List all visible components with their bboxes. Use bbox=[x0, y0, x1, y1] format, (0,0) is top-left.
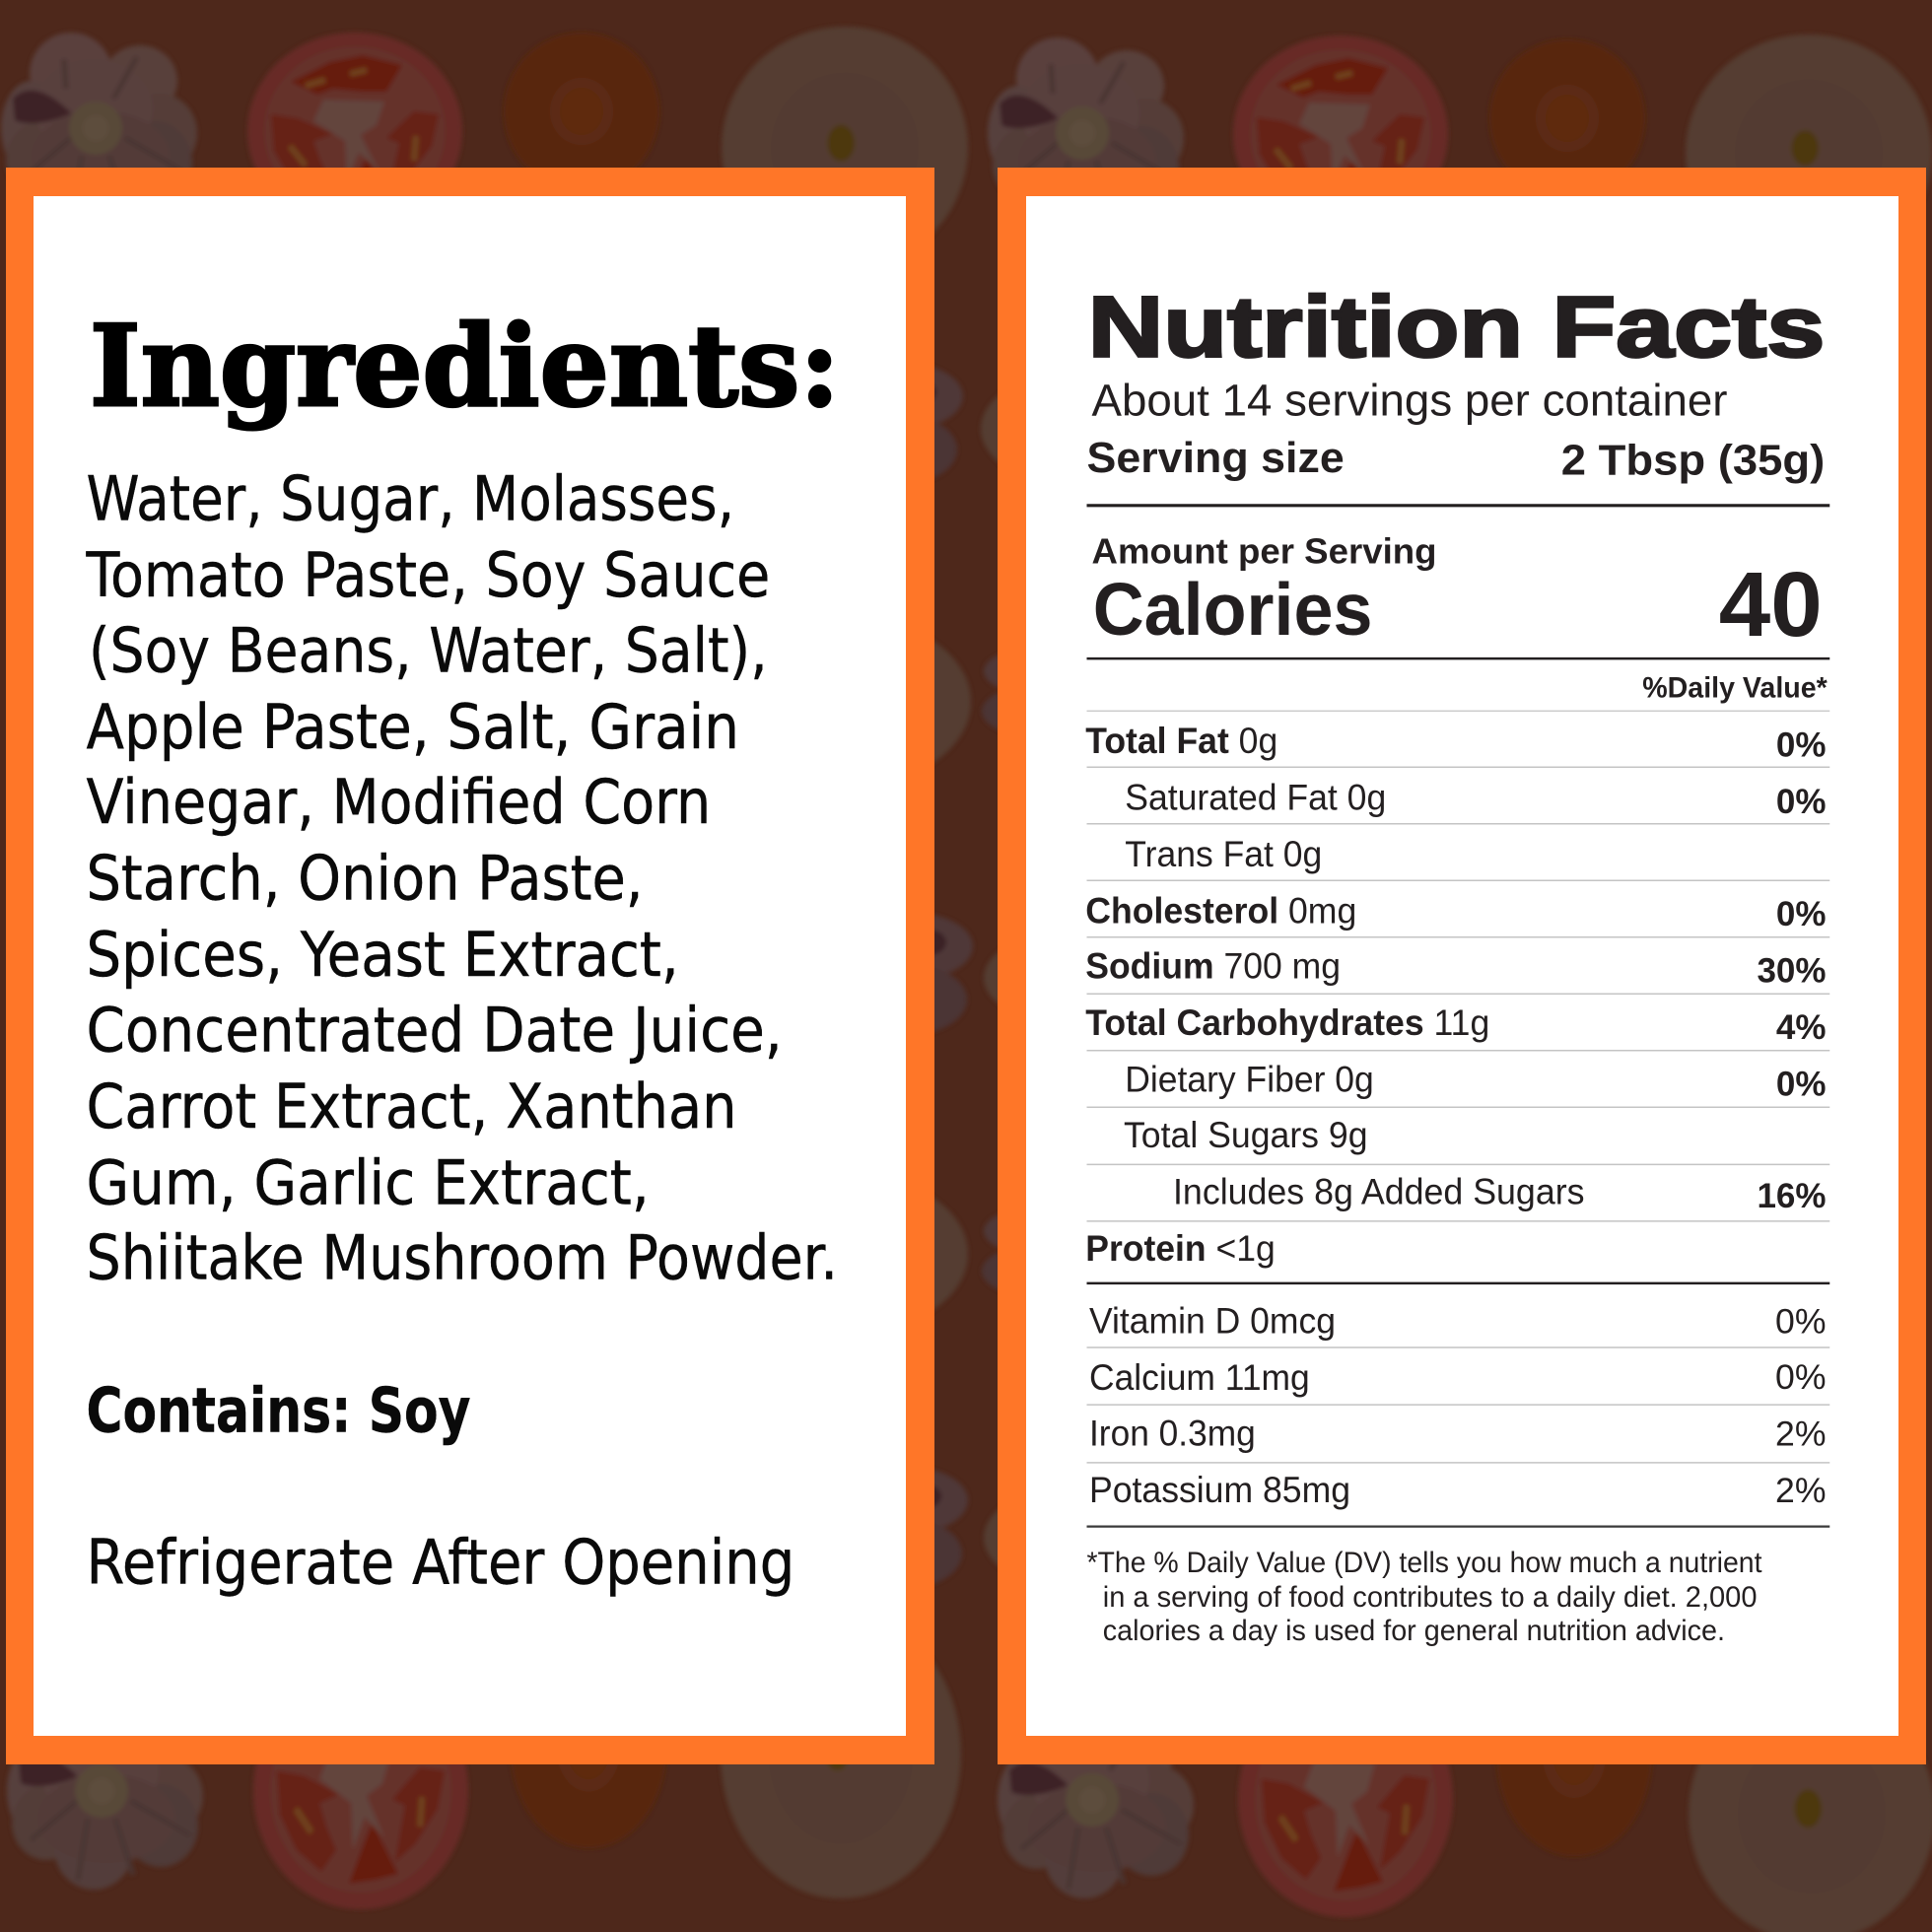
servings per container: About 14 servings per container bbox=[1092, 375, 1728, 425]
nutrient table: Total Sugars 9g bbox=[1124, 1114, 1368, 1155]
heading: ingredients: Ingredients: bbox=[90, 301, 840, 432]
nutrient table: 16% bbox=[1757, 1177, 1827, 1215]
nutrient table: 4% bbox=[1776, 1008, 1827, 1047]
serving size bbox=[1086, 434, 1825, 484]
heading: nutrition facts: Nutrition Facts bbox=[1088, 278, 1825, 375]
footnote bbox=[1086, 1547, 1762, 1647]
ingredients list: Shiitake Mushroom Powder. bbox=[87, 1222, 838, 1294]
ingredients list: Spices, Yeast Extract, bbox=[87, 919, 679, 991]
serving size: 2 Tbsp (35g) bbox=[1561, 436, 1825, 484]
vegetable pattern: bottom row bbox=[7, 1611, 1932, 1932]
vitamins and minerals table bbox=[1086, 1299, 1829, 1510]
nutrient table bbox=[1085, 711, 1829, 1269]
ingredients list: Starch, Onion Paste, bbox=[87, 843, 643, 915]
nutrient table: Trans Fat 0g bbox=[1125, 833, 1322, 874]
vegetable pattern: top row bbox=[1, 27, 1932, 271]
vitamins and minerals table: 0% bbox=[1775, 1357, 1827, 1397]
footnote: *The % Daily Value (DV) tells you how much a nutrient bbox=[1086, 1547, 1762, 1579]
ingredients list: Concentrated Date Juice, bbox=[87, 994, 783, 1066]
ingredients list: Apple Paste, Salt, Grain bbox=[87, 691, 739, 763]
nutrient table: Includes 8g Added Sugars bbox=[1173, 1170, 1585, 1211]
storage note: Refrigerate After Opening bbox=[87, 1526, 794, 1598]
vitamins and minerals table: 2% bbox=[1775, 1414, 1827, 1453]
nutrient table: 0% bbox=[1776, 895, 1827, 933]
daily value header: %Daily Value* bbox=[1642, 672, 1828, 705]
nutrient table: 0% bbox=[1776, 783, 1827, 821]
vitamins and minerals table: Calcium 11mg bbox=[1089, 1356, 1310, 1398]
nutrient table: 0% bbox=[1776, 1065, 1827, 1103]
panel: nutrition facts bbox=[998, 168, 1926, 1764]
vitamins and minerals table: 0% bbox=[1775, 1302, 1827, 1342]
vitamins and minerals table: Vitamin D 0mcg bbox=[1089, 1300, 1336, 1342]
serving size: Serving size bbox=[1086, 434, 1345, 482]
vitamins and minerals table: 2% bbox=[1775, 1471, 1827, 1510]
ingredients list bbox=[86, 463, 838, 1293]
vitamins and minerals table: Iron 0.3mg bbox=[1089, 1412, 1256, 1453]
ingredients list: (Soy Beans, Water, Salt), bbox=[89, 614, 768, 686]
footnote: calories a day is used for general nutrition advice. bbox=[1103, 1615, 1725, 1647]
nutrient table: Dietary Fiber 0g bbox=[1125, 1058, 1374, 1099]
footnote: in a serving of food contributes to a daily diet. 2,000 bbox=[1103, 1581, 1757, 1614]
ingredients list: Tomato Paste, Soy Sauce bbox=[86, 539, 770, 611]
nutrient table: 0% bbox=[1776, 726, 1827, 765]
nutrient table: Cholesterol 0mg bbox=[1085, 889, 1356, 931]
nutrient table: 30% bbox=[1757, 951, 1827, 990]
nutrient table: Total Fat 0g bbox=[1085, 720, 1277, 761]
nutrient table: Sodium 700 mg bbox=[1085, 944, 1341, 986]
nutrient table: Protein <1g bbox=[1085, 1227, 1276, 1269]
ingredients list: Carrot Extract, Xanthan bbox=[87, 1070, 737, 1142]
calories block: Calories bbox=[1093, 568, 1372, 651]
ingredients list: Gum, Garlic Extract, bbox=[87, 1146, 650, 1218]
calories block bbox=[1092, 530, 1823, 656]
calories block: Amount per Serving bbox=[1092, 530, 1437, 571]
nutrient table: Total Carbohydrates 11g bbox=[1085, 1001, 1489, 1043]
allergen note: Contains: Soy bbox=[87, 1374, 471, 1446]
vitamins and minerals table: Potassium 85mg bbox=[1089, 1469, 1350, 1510]
calories block: 40 bbox=[1719, 553, 1823, 656]
ingredients list: Water, Sugar, Molasses, bbox=[87, 463, 734, 535]
nutrient table: Saturated Fat 0g bbox=[1125, 776, 1386, 817]
vegetable pattern: middle gap bbox=[725, 363, 1226, 1597]
panel: ingredients bbox=[6, 168, 934, 1764]
ingredients list: Vinegar, Modified Corn bbox=[87, 766, 711, 838]
